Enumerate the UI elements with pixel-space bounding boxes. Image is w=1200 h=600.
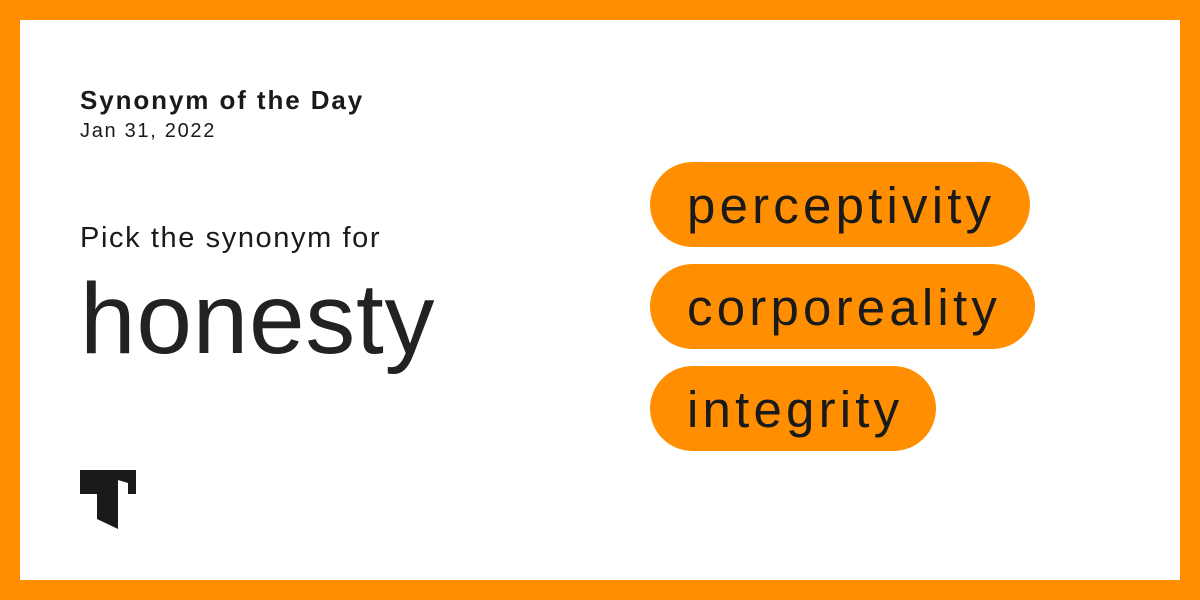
option: integrity: integrity bbox=[687, 381, 903, 438]
prompt: Pick the synonym for bbox=[80, 222, 381, 254]
option: corporeality: corporeality bbox=[687, 279, 1001, 336]
option: corporeality bbox=[650, 264, 1035, 349]
option: perceptivity bbox=[650, 162, 1030, 247]
option: perceptivity: perceptivity bbox=[687, 177, 995, 234]
word: honesty bbox=[80, 263, 435, 375]
icon: logo bbox=[80, 470, 136, 529]
option: integrity bbox=[650, 366, 936, 451]
date: Jan 31, 2022 bbox=[80, 120, 216, 142]
title: Synonym of the Day bbox=[80, 85, 364, 115]
